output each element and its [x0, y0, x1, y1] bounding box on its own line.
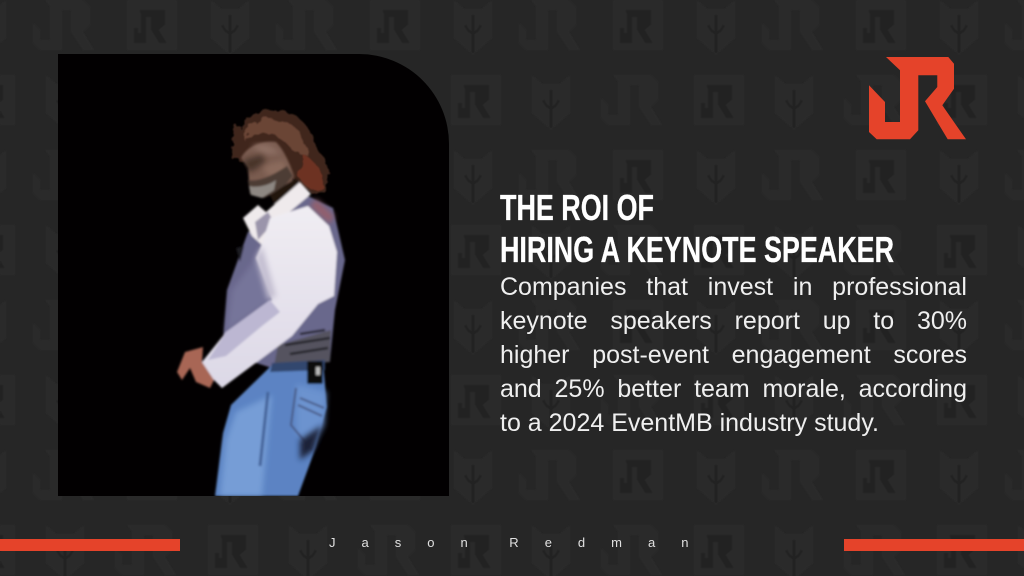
right footer bar — [844, 539, 1024, 551]
white sleeve — [202, 206, 337, 388]
hand — [177, 347, 214, 388]
body text: to a 2024 EventMB industry study. — [500, 409, 879, 437]
body text: higher post-event engagement scores — [500, 341, 967, 369]
face — [240, 140, 296, 187]
body text — [500, 273, 967, 437]
left footer bar — [0, 539, 180, 551]
shirt collar — [243, 182, 311, 245]
footer name: Jason Redman — [329, 535, 714, 550]
vest — [222, 195, 345, 368]
title: THE ROI OF — [500, 187, 654, 228]
belt and mic pack — [270, 360, 325, 372]
body text: and 25% better team morale, according — [500, 375, 967, 403]
jeans — [215, 362, 327, 496]
neck — [270, 178, 300, 206]
beard — [248, 166, 293, 198]
hair — [232, 110, 328, 194]
body text: keynote speakers report up to 30% — [500, 307, 967, 335]
photo panel: speaker on stage — [58, 54, 449, 496]
mic — [236, 246, 244, 262]
title: HIRING A KEYNOTE SPEAKER — [500, 229, 894, 270]
body text: Companies that invest in professional — [500, 273, 967, 301]
